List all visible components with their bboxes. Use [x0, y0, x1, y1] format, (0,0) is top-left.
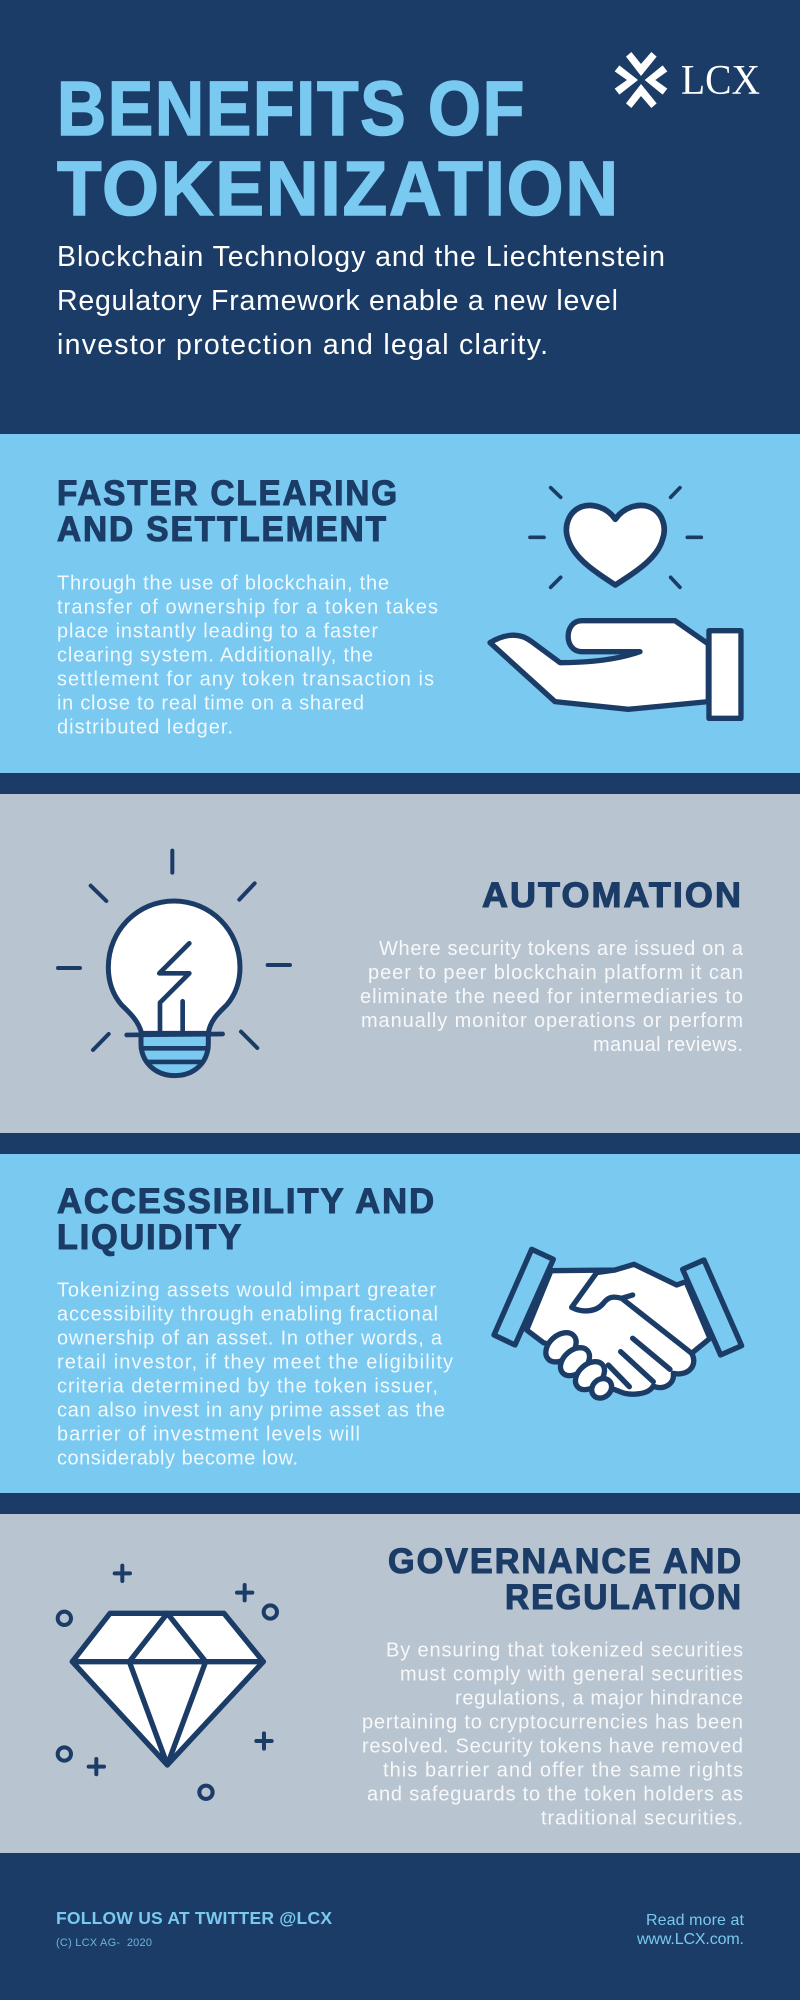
body text	[360, 938, 744, 1056]
body text: distributed ledger.	[57, 716, 233, 738]
body text: considerably become low.	[57, 1448, 298, 1470]
body text: criteria determined by the token issuer,	[57, 1376, 438, 1398]
body text	[57, 1280, 453, 1470]
body text: in close to real time on a shared	[57, 692, 364, 714]
body text: transfer of ownership for a token takes	[57, 596, 438, 618]
icon: hand holding heart	[490, 488, 741, 718]
heading	[388, 1542, 743, 1617]
logo: LCX	[615, 52, 760, 108]
panel: footer	[0, 1853, 800, 2000]
read more link: Read more at	[646, 1912, 745, 1929]
heading: AND SETTLEMENT	[57, 510, 388, 549]
body text: clearing system. Additionally, the	[57, 644, 373, 666]
body text	[362, 1640, 743, 1830]
body text: must comply with general securities	[400, 1664, 743, 1686]
logo: LCX: LCX	[681, 58, 760, 104]
heading: REGULATION	[505, 1578, 743, 1617]
body text: barrier of investment levels will	[57, 1424, 360, 1446]
panel: accessibility and liquidity	[0, 1154, 800, 1493]
body text: Tokenizing assets would impart greater	[57, 1280, 436, 1302]
body text: pertaining to cryptocurrencies has been	[362, 1712, 743, 1734]
body text: ownership of an asset. In other words, a	[57, 1328, 443, 1350]
read more link: www.LCX.com.	[636, 1931, 744, 1948]
icon: diamond	[58, 1566, 277, 1799]
panel: faster clearing and settlement	[0, 434, 800, 773]
heading: AUTOMATION	[482, 876, 743, 915]
copyright: (C) LCX AG- 2020	[56, 1937, 152, 1949]
title: BENEFITS OF	[57, 66, 526, 152]
body text: settlement for any token transaction is	[57, 668, 434, 690]
panel: automation	[0, 794, 800, 1133]
body text: and safeguards to the token holders as	[367, 1784, 743, 1806]
icon: handshake	[494, 1249, 742, 1402]
icon: light bulb	[58, 851, 290, 1076]
subtitle: investor protection and legal clarity.	[57, 329, 548, 361]
panel: header	[0, 0, 800, 434]
subtitle: Regulatory Framework enable a new level	[57, 285, 618, 317]
body text: retail investor, if they meet the eligibility	[57, 1352, 453, 1374]
heading: GOVERNANCE AND	[388, 1542, 743, 1581]
body text: manual reviews.	[593, 1034, 743, 1056]
heading: LIQUIDITY	[57, 1218, 243, 1257]
panel: governance and regulation	[0, 1514, 800, 1853]
body text: traditional securities.	[541, 1808, 743, 1830]
body text: can also invest in any prime asset as the	[57, 1400, 445, 1422]
follow us heading: FOLLOW US AT TWITTER @LCX	[56, 1908, 332, 1928]
body text: Through the use of blockchain, the	[57, 572, 389, 594]
body text: place instantly leading to a faster	[57, 620, 378, 642]
body text: manually monitor operations or perform	[361, 1010, 743, 1032]
body text: regulations, a major hindrance	[455, 1688, 743, 1710]
body text: accessibility through enabling fractional	[57, 1304, 438, 1326]
body text	[57, 572, 438, 738]
body text: peer to peer blockchain platform it can	[368, 962, 743, 984]
heading: FASTER CLEARING	[57, 474, 399, 513]
heading	[57, 474, 399, 549]
subtitle	[57, 241, 665, 361]
title	[57, 66, 620, 232]
title: TOKENIZATION	[57, 146, 620, 232]
read more link	[636, 1912, 745, 1948]
body text: eliminate the need for intermediaries to	[360, 986, 743, 1008]
body text: resolved. Security tokens have removed	[362, 1736, 743, 1758]
body text: Where security tokens are issued on a	[379, 938, 744, 960]
heading: ACCESSIBILITY AND	[57, 1182, 436, 1221]
body text: this barrier and offer the same rights	[383, 1760, 743, 1782]
body text: By ensuring that tokenized securities	[386, 1640, 743, 1662]
subtitle: Blockchain Technology and the Liechtenstein	[57, 241, 665, 273]
heading	[57, 1182, 436, 1257]
